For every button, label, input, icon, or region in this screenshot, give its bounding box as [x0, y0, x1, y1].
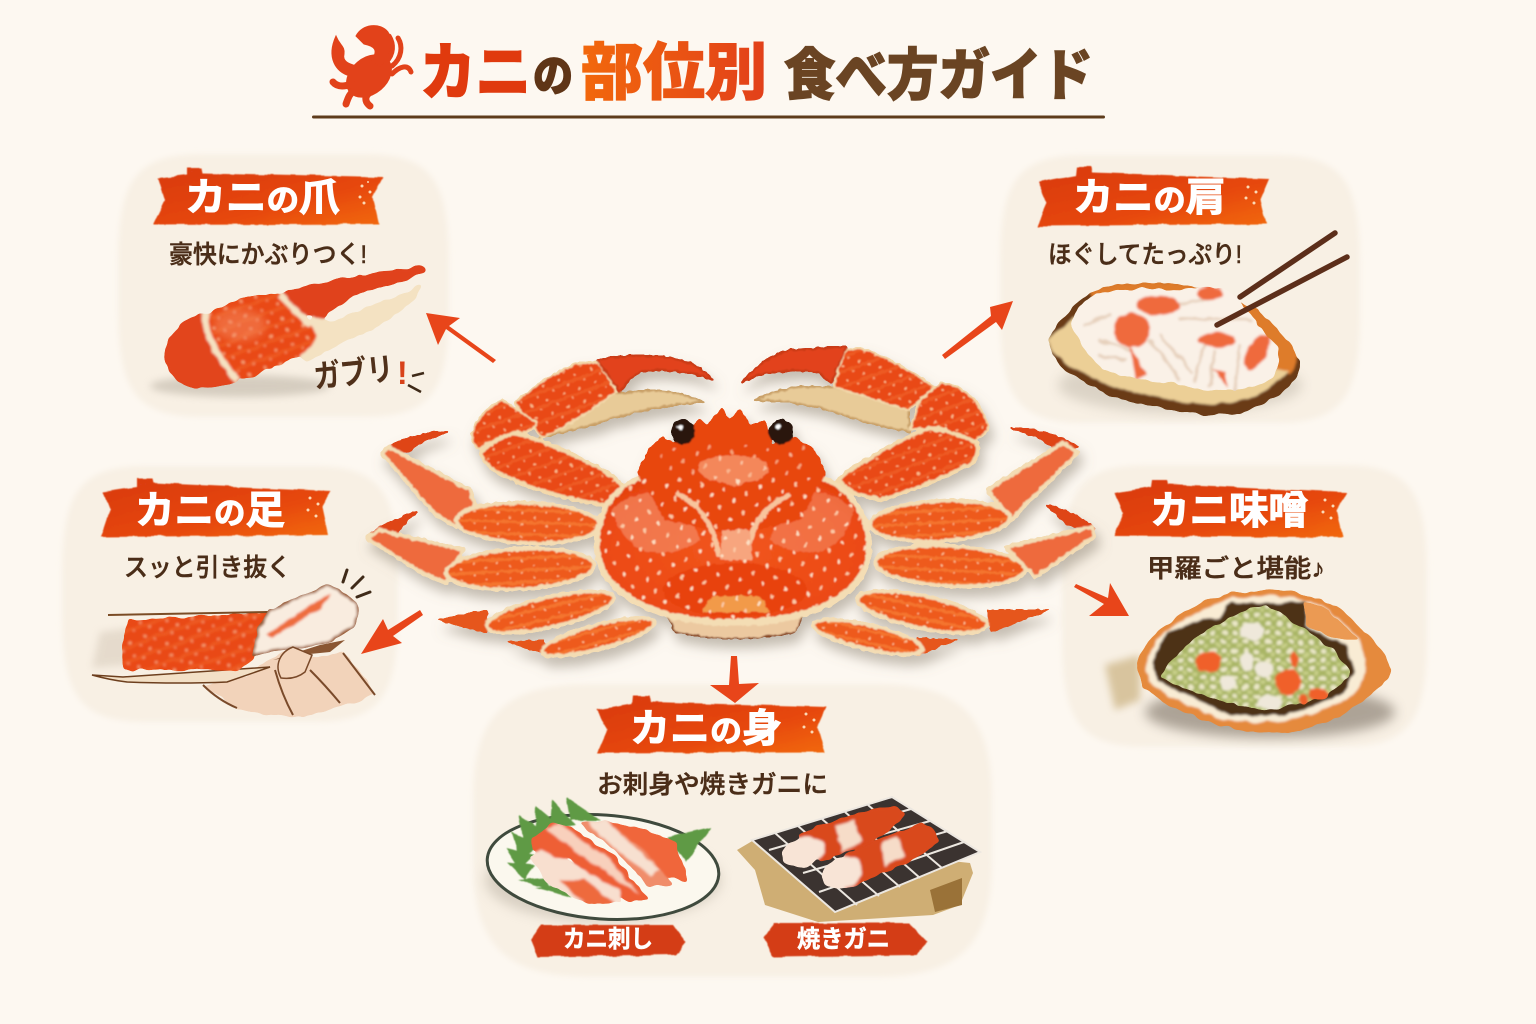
motion lines [343, 570, 370, 597]
crab meat [1070, 288, 1279, 390]
ribbon heading: body meat: カニの身 [630, 708, 782, 751]
illustration: grilled crab [737, 797, 980, 922]
ribbon heading: legs: カニの足 [135, 490, 285, 533]
caption: miso: 甲羅ごと堪能♪ [1147, 555, 1325, 583]
shell lobes [612, 492, 700, 552]
sound effect: ガブリ [312, 351, 395, 395]
arrow: to miso [1074, 583, 1129, 616]
grill net [752, 797, 980, 912]
panel background [118, 154, 449, 417]
arrow: to shoulder [942, 301, 1013, 359]
left claw [472, 356, 712, 505]
sound effect: ! [397, 355, 408, 391]
label: yaki gani: 焼きガニ [797, 926, 890, 953]
caption: claw: 豪快にかぶりつく! [169, 241, 367, 269]
right legs [811, 428, 1094, 661]
ribbon heading: claw: カニの爪 [185, 177, 340, 220]
ribbon heading: body meat [597, 696, 827, 753]
arrow: to claw [426, 313, 496, 363]
illustration: claw [150, 265, 425, 397]
illustration: leg pulled by hand [92, 570, 375, 717]
panel background [1062, 465, 1427, 747]
illustration: sashimi plate [484, 797, 722, 927]
panel background [1000, 155, 1360, 423]
panel: shoulder [1000, 155, 1360, 423]
wooden stove [737, 840, 973, 922]
ribbon heading: legs [101, 479, 331, 537]
panel background [473, 684, 992, 977]
pulled meat [253, 585, 357, 657]
hand [203, 647, 375, 717]
sashimi slices [529, 820, 688, 903]
chopsticks [1217, 233, 1347, 325]
caption: body meat: お刺身や焼きガニに [597, 771, 828, 799]
eyes [671, 420, 793, 444]
title text: how to eat guide: 食べ方ガイド [784, 44, 1093, 107]
label: kani sashi: カニ刺し [563, 926, 653, 953]
ribbon heading: shoulder [1037, 167, 1269, 226]
panel: body meat [473, 684, 992, 977]
caption: shoulder: ほぐしてたっぷり! [1048, 241, 1242, 269]
title text: kani: カニ [420, 39, 531, 108]
arrow: to legs [361, 610, 423, 654]
ribbon heading: shoulder: カニの肩 [1073, 177, 1226, 220]
panel: legs [62, 466, 398, 722]
title [312, 26, 1105, 119]
ribbon heading: miso [1114, 480, 1347, 537]
icon: crab logo [332, 26, 411, 106]
arrow: to body meat [710, 656, 759, 703]
label: kani sashi [531, 925, 686, 957]
title underline [312, 116, 1105, 118]
grilled legs [778, 806, 940, 894]
head [637, 408, 826, 535]
illustration: crab miso shell [1105, 590, 1395, 738]
ribbon heading: miso: カニ味噌 [1150, 490, 1308, 533]
caption: legs: スッと引き抜く [124, 554, 291, 582]
title text: no: の [533, 52, 573, 101]
right claw [743, 347, 989, 500]
ribbon heading: claw [153, 168, 383, 225]
mouth plate [665, 612, 805, 638]
leaves [506, 797, 711, 898]
panel: miso [1062, 465, 1427, 747]
panel background [62, 466, 398, 722]
illustration: shoulder meat [1048, 233, 1347, 415]
central crab [367, 347, 1094, 664]
panel: claw [118, 154, 449, 417]
left legs [367, 432, 657, 664]
carapace [594, 408, 872, 626]
label: yaki gani [764, 923, 928, 957]
title text: by part: 部位別 [581, 39, 767, 108]
